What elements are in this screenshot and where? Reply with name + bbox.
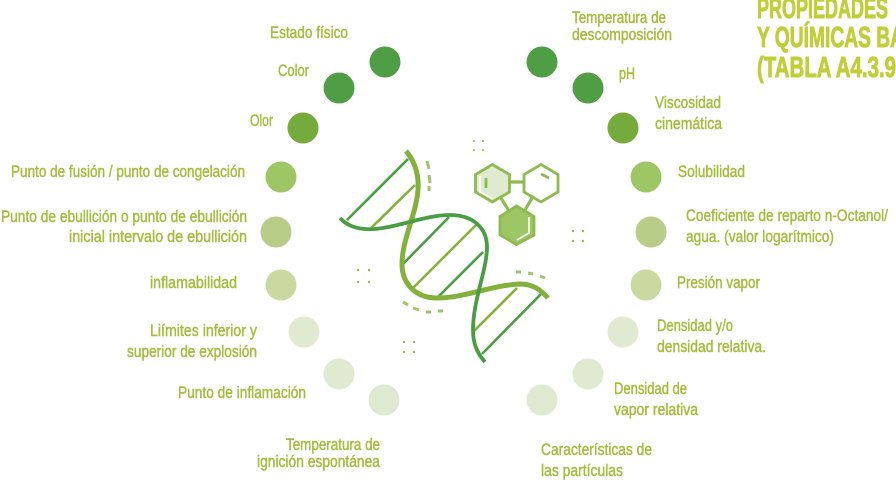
right labels: Densidad de — [614, 379, 687, 398]
left labels: Color — [278, 61, 309, 80]
right labels: descomposición — [572, 25, 672, 44]
right labels — [541, 8, 888, 480]
left property dots — [260, 46, 400, 416]
left labels: Olor — [250, 111, 273, 130]
left labels: inflamabilidad — [150, 273, 237, 292]
left labels: superior de explosión — [127, 342, 257, 361]
decorative dot clusters — [357, 140, 584, 353]
right labels: Viscosidad — [655, 93, 721, 112]
right property dots — [526, 46, 666, 416]
right labels: agua. (valor logarítmico) — [686, 227, 834, 246]
left labels: Punto de ebullición o punto de ebullición — [1, 207, 247, 226]
icon: DNA helix — [340, 151, 548, 362]
left labels: ignición espontánea — [257, 452, 380, 471]
right labels: Características de — [541, 440, 652, 459]
right labels: las partículas — [541, 461, 623, 480]
title — [757, 0, 896, 84]
right labels: Solubilidad — [678, 162, 745, 181]
right labels: densidad relativa. — [657, 337, 766, 356]
right labels: pH — [619, 64, 635, 83]
right labels: Presión vapor — [677, 273, 760, 292]
right labels: Densidad y/o — [657, 316, 733, 335]
right labels: vapor relativa — [614, 400, 698, 419]
left labels: Estado físico — [270, 23, 348, 42]
right labels: Temperatura de — [572, 8, 666, 27]
icon: molecule — [476, 164, 558, 244]
left labels: Temperatura de — [286, 435, 380, 454]
left labels — [1, 23, 380, 471]
left labels: inicial intervalo de ebullición — [69, 227, 247, 246]
left labels: Liímites inferior y — [150, 321, 257, 340]
right labels: cinemática — [655, 114, 722, 133]
left labels: Punto de inflamación — [178, 383, 306, 402]
left labels: Punto de fusión / punto de congelación — [11, 162, 245, 181]
